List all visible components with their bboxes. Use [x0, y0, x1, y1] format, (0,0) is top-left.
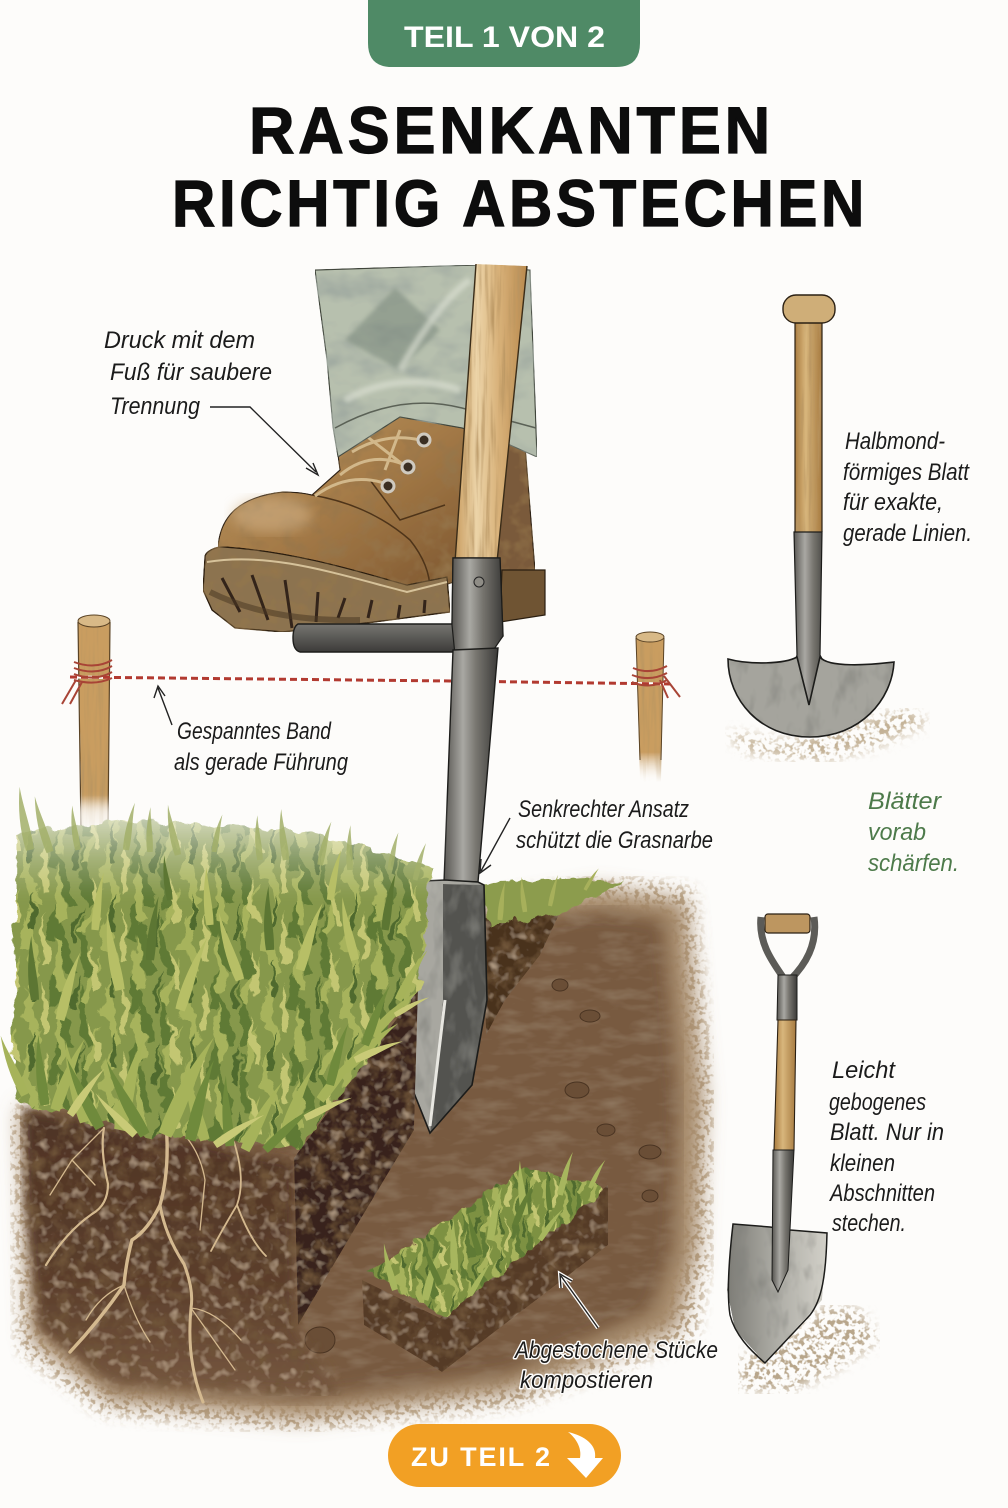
post left	[78, 615, 110, 840]
tool: half-moon edger	[725, 295, 930, 762]
title: RICHTIG ABSTECHEN	[172, 166, 868, 240]
annotation: half-moon blade: für exakte,	[843, 489, 943, 516]
badge: Teil 1 von 2: TEIL 1 VON 2	[404, 21, 605, 54]
shovel shaft	[774, 1020, 796, 1150]
cut sod piece	[362, 1151, 608, 1372]
sod grass	[368, 1165, 605, 1318]
annotation: curved blade: Blatt. Nur in	[830, 1119, 944, 1146]
title: RASENKANTEN	[249, 93, 774, 167]
annotation: curved blade: stechen.	[832, 1210, 906, 1237]
boot heel	[500, 570, 545, 622]
title	[172, 93, 868, 240]
annotation: vertical cut	[480, 796, 713, 873]
annotation: compost: Abgestochene Stücke	[513, 1337, 718, 1364]
D handle	[761, 917, 815, 980]
shovel socket upper	[777, 975, 797, 1020]
roots	[46, 1122, 266, 1402]
badge: Teil 1 von 2	[368, 0, 640, 67]
soil block side wall	[294, 990, 418, 1325]
icon: curved down arrow	[567, 1432, 603, 1478]
note: sharpen blades	[868, 788, 959, 877]
spade: main	[293, 264, 527, 1133]
annotation: foot pressure	[104, 327, 318, 475]
half-moon handle	[795, 318, 822, 532]
boot	[203, 415, 545, 632]
shovel dirt	[738, 1305, 880, 1394]
annotation: curved blade	[828, 1057, 944, 1237]
shovel socket lower	[772, 1150, 794, 1292]
button: to part 2: ZU TEIL 2	[411, 1442, 550, 1472]
annotation: half-moon blade: gerade Linien.	[843, 520, 972, 547]
annotation: foot pressure: Trennung	[110, 393, 201, 420]
spade handle	[455, 264, 527, 562]
boot welt	[207, 559, 447, 592]
post right	[636, 632, 664, 782]
grass blades middle	[24, 849, 397, 1021]
dirt under half-moon blade	[725, 708, 930, 762]
annotation: half-moon blade	[843, 428, 972, 547]
note: sharpen blades: vorab	[868, 819, 926, 846]
annotation: half-moon blade: förmiges Blatt	[843, 459, 970, 486]
spade blade	[402, 880, 487, 1133]
spade foot bar and socket	[293, 558, 503, 652]
boot sole	[203, 547, 450, 632]
ground soil	[10, 876, 714, 1432]
annotation: curved blade: Abschnitten	[828, 1180, 935, 1207]
annotation: vertical cut: schützt die Grasnarbe	[516, 827, 713, 854]
annotation: foot pressure: Druck mit dem	[104, 327, 255, 354]
note: sharpen blades: Blätter	[868, 788, 942, 815]
annotation: foot pressure: Fuß für saubere	[110, 359, 272, 386]
back grass strip with soil wall	[482, 867, 622, 1035]
boot eyelets	[382, 434, 430, 492]
soil clods on ground	[305, 979, 661, 1353]
pants	[315, 265, 537, 457]
boot toe highlight	[232, 497, 312, 533]
boot laces	[315, 430, 420, 496]
annotation: compost	[513, 1274, 718, 1394]
sod soil	[362, 1185, 608, 1372]
annotation: string	[154, 686, 349, 776]
annotation: string: als gerade Führung	[174, 749, 349, 776]
grass blades back edge	[12, 786, 427, 881]
grass blades front edge	[0, 947, 430, 1153]
spade shaft	[444, 648, 498, 882]
annotation: vertical cut: Senkrechter Ansatz	[518, 796, 689, 823]
soil block front face	[20, 990, 418, 1396]
annotation: compost: kompostieren	[520, 1367, 653, 1394]
button: to part 2	[388, 1424, 621, 1487]
annotation: curved blade: gebogenes	[829, 1089, 926, 1116]
note: sharpen blades: schärfen.	[868, 850, 959, 877]
half-moon blade	[728, 657, 894, 737]
shovel blade	[727, 1224, 827, 1363]
annotation: curved blade: kleinen	[830, 1150, 895, 1177]
annotation: string: Gespanntes Band	[177, 718, 332, 745]
annotation: curved blade: Leicht	[832, 1057, 896, 1084]
annotation: half-moon blade: Halbmond-	[845, 428, 945, 455]
tool: D-handle shovel	[727, 914, 880, 1394]
lawn top surface	[6, 805, 440, 1148]
boot sole tread	[222, 575, 425, 628]
half-moon socket	[793, 532, 827, 708]
boot seam	[312, 480, 445, 590]
taut string	[62, 660, 680, 704]
